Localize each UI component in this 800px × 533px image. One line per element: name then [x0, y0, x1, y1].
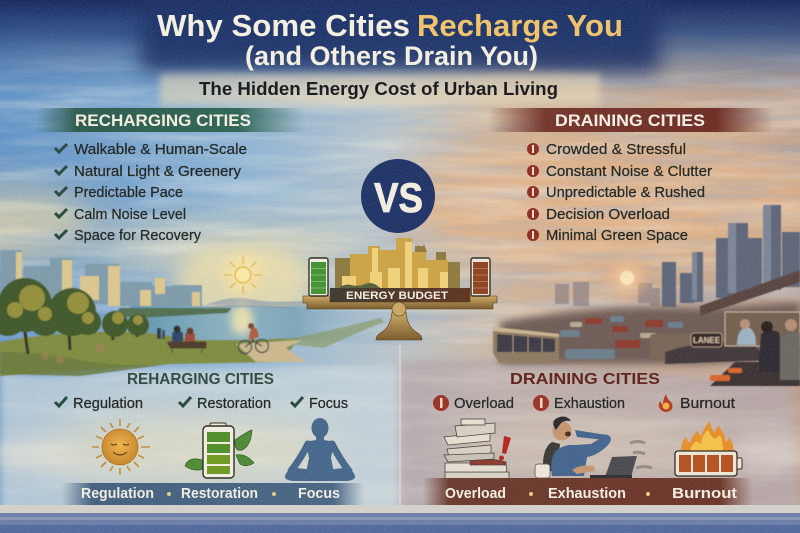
warning row — [433, 394, 736, 412]
recharging benefits: Predictable Pace — [74, 184, 183, 201]
heading: recharging cities: RECHARGING CITIES — [75, 112, 251, 130]
caption band: Regulation — [81, 485, 154, 502]
caption band — [62, 483, 364, 505]
title backdrop — [140, 0, 660, 106]
panel: recharging outcomes — [55, 371, 364, 505]
road sign — [691, 333, 722, 347]
icon: exhausted worker at laptop — [535, 417, 652, 478]
draining problems: Minimal Green Space — [546, 227, 688, 244]
warning row: Exhaustion — [554, 395, 625, 412]
heading: REHARGING CITIES — [127, 371, 274, 388]
icon: smiling sun — [92, 419, 150, 475]
illustration: congested city — [493, 205, 800, 386]
recharging benefits: Space for Recovery — [74, 227, 201, 244]
caption band: Overload — [445, 485, 506, 502]
icon: exclamation mark — [499, 436, 511, 460]
balance beam and base — [303, 296, 497, 340]
title: Why Some Cities — [157, 8, 410, 43]
title — [157, 8, 623, 71]
warning row: Burnout — [680, 395, 736, 412]
heading: draining cities — [488, 108, 773, 132]
crowd at bus stop — [725, 312, 800, 380]
energy budget label — [330, 288, 470, 303]
checklist row: Restoration — [197, 395, 271, 412]
title: Recharge You — [417, 8, 623, 43]
recharging benefits: Natural Light & Greenery — [74, 163, 241, 180]
icon: full battery — [309, 258, 328, 296]
hazy towers — [555, 205, 800, 307]
icon: hazy sun — [601, 252, 653, 304]
icon: burning battery — [675, 421, 742, 476]
heading: recharging cities — [36, 108, 306, 132]
icon: battery with leaves — [185, 423, 254, 478]
panel: draining cities list — [488, 108, 773, 244]
panel: recharging cities list — [36, 108, 306, 244]
illustration: calm waterfront city — [0, 245, 385, 376]
VS badge: VS — [374, 174, 423, 221]
VS badge — [361, 159, 435, 233]
heading: draining cities: DRAINING CITIES — [555, 112, 705, 130]
headlights — [710, 366, 768, 381]
lake — [115, 305, 385, 340]
recharging benefits: Calm Noise Level — [74, 206, 186, 223]
energy budget label: ENERGY BUDGET — [346, 290, 448, 302]
caption band: Focus — [298, 485, 340, 502]
heading: DRAINING CITIES — [510, 371, 660, 388]
trees — [0, 278, 149, 354]
caption band — [423, 478, 753, 505]
checklist row: Regulation — [73, 395, 143, 412]
recharging benefits — [55, 141, 247, 244]
draining problems: Unpredictable & Rushed — [546, 184, 705, 201]
icon: stack of books — [444, 419, 509, 481]
warning row: Overload — [454, 395, 514, 412]
caption band: Burnout — [672, 485, 737, 502]
skyline — [335, 238, 460, 291]
caption band: Exhaustion — [548, 485, 626, 502]
panel: draining outcomes — [423, 371, 753, 505]
grass and path — [0, 318, 384, 376]
icon: meditating figure — [285, 418, 355, 481]
icon: depleted battery — [471, 258, 490, 296]
draining problems — [527, 141, 712, 244]
distant buildings — [0, 250, 330, 307]
checklist row — [55, 395, 348, 412]
icon: sun — [215, 247, 271, 303]
traffic jam — [493, 270, 800, 386]
checklist row: Focus — [309, 395, 348, 412]
title: (and Others Drain You) — [245, 41, 538, 71]
bus — [493, 327, 770, 364]
caption band: Restoration — [181, 485, 258, 502]
draining problems: Constant Noise & Clutter — [546, 163, 712, 180]
recharging benefits: Walkable & Human-Scale — [74, 141, 247, 158]
lower panels backdrop — [0, 345, 800, 518]
bottom blue strip — [0, 505, 800, 533]
draining problems: Decision Overload — [546, 206, 670, 223]
energy budget scale — [303, 238, 497, 340]
road sign: LANEE — [693, 336, 721, 345]
draining problems: Crowded & Stressful — [546, 141, 686, 158]
subtitle: The Hidden Energy Cost of Urban Living — [199, 79, 558, 99]
people on bench and cyclist — [157, 323, 268, 354]
